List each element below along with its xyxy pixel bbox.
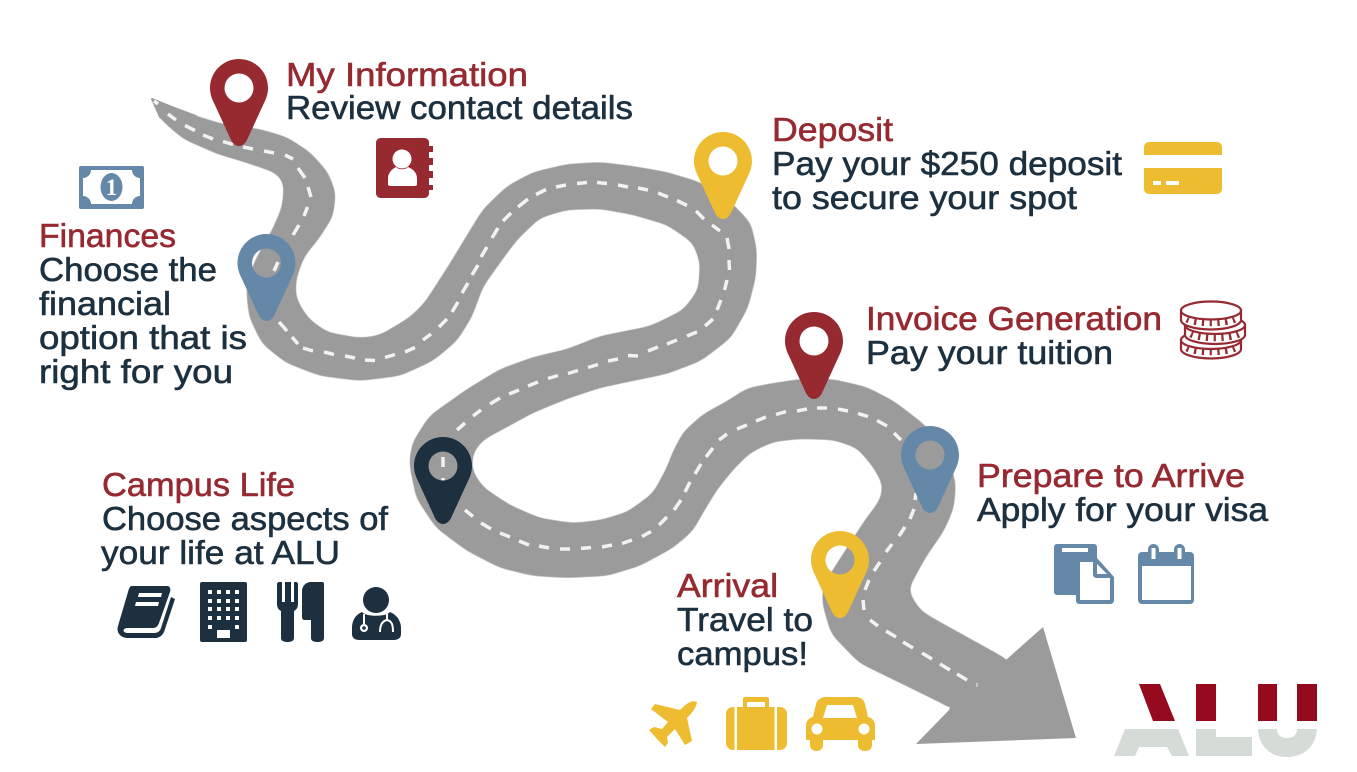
icon: doctor <box>352 587 401 640</box>
icon: suitcase <box>726 697 787 750</box>
text: Campus Life <box>101 467 389 572</box>
icon: book <box>117 586 175 638</box>
icon: airplane <box>649 701 697 747</box>
text: My Information <box>286 57 633 127</box>
text: Campus Life: Choose aspects of <box>102 501 389 538</box>
text: Arrival: Arrival <box>677 568 778 605</box>
text: Campus Life: Campus Life <box>102 467 295 504</box>
text: Arrival <box>677 568 813 673</box>
pin: Campus Life <box>414 437 472 524</box>
road <box>150 98 1076 744</box>
icon: credit card <box>1144 142 1222 194</box>
pin: Deposit <box>694 132 752 219</box>
text: Prepare to Arrive: Prepare to Arrive <box>977 458 1245 495</box>
pin: Prepare to Arrive <box>901 426 959 513</box>
pin: My Information <box>210 59 268 146</box>
pin: Arrival <box>811 531 869 618</box>
icon: banknote <box>79 166 144 209</box>
text: Deposit: to secure your spot <box>772 180 1078 217</box>
text: Finances: Finances <box>39 218 176 255</box>
text: Invoice Generation <box>866 301 1162 372</box>
icon: address book <box>376 138 433 198</box>
text: Invoice Generation: Pay your tuition <box>866 335 1113 372</box>
text: Arrival: Travel to <box>677 602 813 639</box>
icon: coin stack <box>1181 302 1245 358</box>
text: My Information: My Information <box>286 57 528 94</box>
text: Finances <box>39 218 247 391</box>
icon: banknote: 1 <box>106 175 117 200</box>
text: Arrival: campus! <box>677 636 808 673</box>
text: Campus Life: your life at ALU <box>101 535 340 572</box>
text: Finances: Choose the <box>39 252 217 289</box>
icon: documents <box>1054 544 1114 604</box>
text: Finances: financial <box>39 286 171 323</box>
text: Prepare to Arrive: Apply for your visa <box>977 492 1268 529</box>
text: Deposit: Pay your $250 deposit <box>772 146 1123 183</box>
pin: Invoice Generation <box>785 312 843 399</box>
text: Prepare to Arrive <box>977 458 1268 529</box>
text: Finances: option that is <box>39 320 247 357</box>
pin: Finances <box>238 234 296 321</box>
text: Invoice Generation: Invoice Generation <box>866 301 1162 338</box>
icon: calendar <box>1138 544 1194 604</box>
icon: car <box>806 697 875 751</box>
icon: building <box>200 582 247 642</box>
icon: fork and knife <box>277 582 324 642</box>
text: Deposit <box>772 112 1123 217</box>
logo: ALU <box>1114 684 1317 757</box>
text: My Information: Review contact details <box>286 90 633 127</box>
text: Deposit: Deposit <box>772 112 894 149</box>
text: Finances: right for you <box>39 354 233 391</box>
